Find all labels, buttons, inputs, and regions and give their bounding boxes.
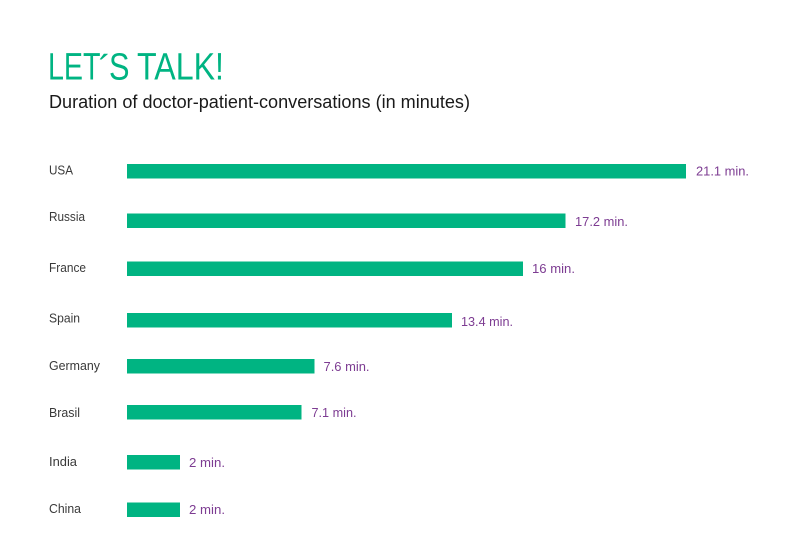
title: S — [109, 46, 130, 88]
row: USA — [49, 162, 749, 178]
subtitle: Duration of doctor-patient-conversations (in minutes) — [49, 92, 470, 112]
row: India — [49, 454, 225, 470]
bar chart — [49, 162, 749, 517]
row: Germany: Germany — [49, 358, 100, 373]
row: France: 16 min. — [532, 261, 575, 276]
title — [48, 46, 224, 91]
row: France — [49, 260, 575, 276]
row: China: 2 min. — [189, 502, 225, 517]
row: India: 2 min. — [189, 455, 225, 470]
row: Brasil: Brasil — [49, 405, 80, 420]
row: USA: 21.1 min. — [696, 164, 749, 178]
row: China: China — [49, 501, 82, 516]
title: TALK! — [137, 46, 224, 88]
row: China — [49, 501, 225, 517]
row: Russia — [49, 209, 628, 229]
row: Brasil — [49, 405, 356, 420]
row: Spain: 13.4 min. — [461, 314, 513, 329]
row: Spain: Spain — [49, 310, 80, 326]
row: Russia: 17.2 min. — [575, 214, 628, 229]
row: Brasil: 7.1 min. — [312, 405, 356, 420]
row: Germany — [49, 358, 370, 374]
title: LET — [48, 46, 100, 88]
title: ´ — [98, 49, 111, 91]
row: Spain — [49, 310, 513, 329]
row: France: France — [49, 260, 86, 275]
row: USA: USA — [49, 162, 73, 178]
row: Germany: 7.6 min. — [324, 359, 370, 374]
row: India: India — [49, 454, 78, 469]
row: Russia: Russia — [49, 209, 86, 224]
